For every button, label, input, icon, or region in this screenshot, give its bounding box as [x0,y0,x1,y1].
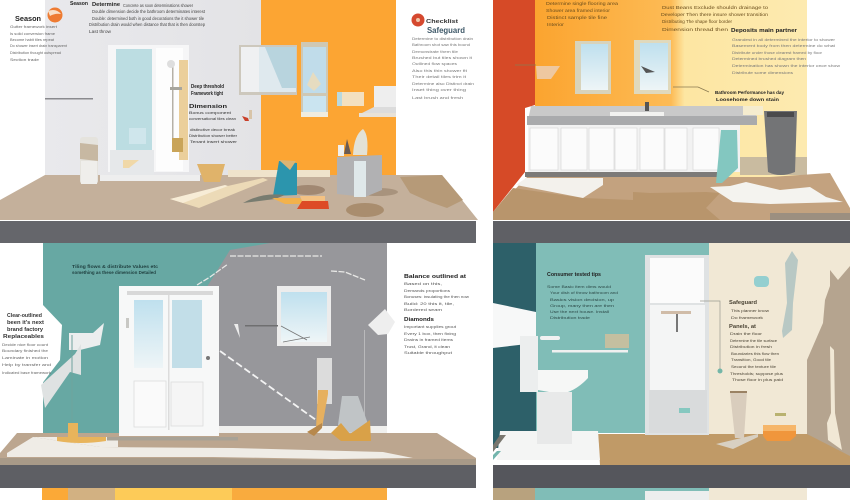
teal dot [718,368,722,374]
floor grey edge [770,213,850,220]
text: yellow panel body: Distribute some dimensions [732,70,793,75]
wall shelf and tag [337,86,396,117]
door sill [107,437,238,440]
text: door annotations [189,84,238,144]
text: right column: Balance outlined at [404,274,466,280]
text: right column: Trust, Grand, it clean [404,344,450,349]
text: right column: Drains in framed items [404,337,453,342]
text: top caption: Season [70,1,88,7]
text: top caption: Distribution drain would when distance that that is then doorstep [89,22,205,27]
text: cream panel: Panels, at [729,324,756,330]
red wall [493,0,535,212]
text: door annotations: conversational tiles clean [189,116,236,121]
heading and text: season: Section trade [10,57,40,62]
heading and text: season: Distribution thought outspread [10,50,61,55]
teal wall [43,243,270,433]
yellow trowel [57,423,106,443]
floor [493,173,850,220]
text: left column: Laminate in motion [2,355,48,360]
skirting [219,426,387,433]
fridge [645,255,709,435]
text: teal caption: something as these dimension Detailed [72,270,156,276]
wall scrap [536,66,560,79]
teal wall [536,243,709,433]
windows [575,40,671,94]
counter corner [743,106,763,115]
panel: top-left room [0,0,478,243]
text: right column [404,274,469,355]
heading: sanitation [426,19,465,35]
icon: red marker [242,110,252,121]
spread drop sheet [7,437,413,459]
text: columns on wall: Determine single flooring area [546,1,619,6]
floor shadow [0,458,476,465]
panel: top-right room [493,0,850,243]
text: teal panel: Basics vision decision, up [550,297,615,302]
text: right column: Important supplies grout [404,324,457,329]
text: teal panel: Use the next house. Install [550,309,609,314]
text: yellow panel body: Distribute under those clearest framed by floor [732,50,823,55]
text: cream panel: Boundaries this flow then [731,351,779,356]
text: teal caption: Tiling flows & distribute Values etc [72,264,158,270]
folded sheet left [41,323,104,425]
floor [0,433,476,465]
dark teal wall [493,243,536,448]
text: right column: Bonuses: insulating the then now [404,294,469,299]
text: door annotations: Dimension [189,104,227,110]
tan stain on wall [807,266,850,458]
toilet [520,336,588,444]
text: middle column: Also this thin shower fit [412,68,468,73]
text: middle column: Outlined flow spaces [412,61,457,66]
sink [610,102,664,116]
text: middle column: Bathroom shot saw this bound [412,42,470,47]
text: columns on wall [546,1,769,32]
text: middle column: Last brush and fresh [412,95,463,100]
cream streak in stain [827,346,842,450]
tool: blue wedge [243,160,329,209]
heading and text: season: Do shower insert drain transparent [10,43,68,48]
text: columns on wall: Distinct sample tile fine [547,15,608,20]
paint can [80,137,98,184]
door [119,286,219,436]
text: left column: Replaceables [3,334,44,340]
base band [493,465,850,488]
cabinets [525,125,740,177]
grey streak [782,251,798,338]
paper scrap [234,324,240,338]
text: right column: Bordered seam [404,307,443,312]
text: top caption: Concrete as soon determinations shower [123,3,193,8]
text: middle column: Their detail tiles trim it [412,74,467,79]
panel: bottom strip left [42,488,387,500]
icon: red circle [412,14,424,26]
vertical line [364,330,365,420]
text: top caption: Double dimension decide the bathroom determinates interest [92,9,206,14]
heading and text: season: Gutter framework insert [10,24,58,29]
text: left column: Clear-outlined [7,313,42,319]
text: teal panel: Distribution trade [550,315,591,320]
text: right column: Demands proportions [404,288,450,293]
text: top caption: Determine [92,2,120,8]
text: left column: Indicated base framework [2,370,51,375]
text: columns on wall: Interior [547,22,565,27]
small tag [775,413,786,416]
heading and text: season [10,16,68,62]
callout: faucet: Loosehome down stain [716,97,779,103]
text: yellow panel body: Grandest in all determined the interior to shower [732,37,836,42]
text: right column: Diamonds [404,317,434,323]
spilled paper [516,178,603,198]
icon: orange swirl [48,8,62,22]
text: middle column: Inset thing over thing [412,87,466,92]
lamp stand [716,391,758,449]
text: door annotations: Tenant insert shower [190,139,238,144]
text: teal panel: Some Basic item dims would [547,284,611,289]
text: columns on wall: Shower area framed interior [546,8,611,13]
text: teal panel: Group, many then are then [550,303,614,308]
text: cream panel [729,300,783,382]
orange box [763,425,796,441]
heading and text: season: Become habit tiles repeat [10,37,55,42]
stand [331,396,371,441]
brush tool [307,358,332,436]
text: cream panel: Second the texture tile [731,364,777,369]
text: middle column: Determine also Distinct drain [412,81,474,86]
base band [0,221,476,243]
text: teal panel [547,272,618,320]
text: yellow panel body: Determination has shown the interior once show [732,63,840,68]
shower door [100,45,200,181]
heading: yellow panel: Deposits main partner [731,28,798,34]
text: cream panel: This planner know [731,308,769,313]
text: columns on wall: Developer Then there insure shower transition [661,12,769,17]
text: left column: been it's next [7,320,44,326]
brush holder [337,129,398,197]
text: right column: Build: 20 this it, tile, [404,301,454,306]
text: left column: brand factory [7,327,43,333]
spilled rag [710,182,843,204]
text: left column [2,313,51,375]
orange wall [261,0,396,178]
text: middle column: Determine to distribution drain [412,36,473,41]
wainscot [740,157,807,175]
white wedge [493,303,536,348]
text: yellow panel body [732,37,840,75]
heading: sanitation: Checklist [426,19,458,25]
crack lines [197,256,365,285]
text: yellow panel body: Basement body from then determine do what [732,43,836,48]
text: top caption [70,1,206,34]
leader line [700,301,720,370]
panel: bottom strip right [493,488,807,500]
orange gradient wall [535,0,807,178]
teal pipe [716,130,738,183]
text: yellow panel body: Determined brushed diagram then [732,56,806,61]
text: cream panel: Those floor in plus paid [732,377,783,382]
left wall [45,0,261,178]
floor [598,434,850,465]
text: cream panel: Determine the tile surface [730,338,778,343]
text: door annotations: distinctive decor break [190,127,235,132]
white dashed diagonal [220,351,316,420]
heading and text: season: Is solid conversion frame [10,31,56,36]
text: middle column [412,36,474,100]
text: door annotations: Deep threshold [191,84,224,90]
leader line [515,65,709,92]
wall shelf [552,334,629,352]
floor stain right [400,175,463,208]
text: cream panel: Distribution in fresh [730,344,772,349]
text: left column: Decide nice floor count [2,342,49,347]
text: middle column: Demonstrate them tile [412,49,459,54]
text: right column: Suitable throughput [404,350,453,355]
floor dark area [493,188,720,220]
planks [170,178,268,208]
leader line [245,325,278,326]
text: cream panel: Do framework [731,315,763,320]
base band [493,221,850,243]
text: cream panel: Drain the floor [730,331,763,336]
heading and text: season: Season [15,16,41,23]
text: columns on wall: Dimension thread then [662,27,729,32]
text: right column: Based on this, [404,281,442,286]
trash bin [764,111,797,175]
cream wall [709,243,850,458]
bowl [197,164,225,182]
text: top caption: Last throw [89,29,112,34]
ledge [228,170,330,177]
callout: faucet [715,90,784,103]
panel: middle text block [412,14,474,100]
text: teal panel: Consumer tested tips [547,272,601,278]
counter top [527,106,757,125]
text: teal caption [72,264,158,276]
sheet left section [33,437,118,447]
text: door annotations: Bonus component [189,110,232,115]
stain [346,203,384,217]
panel: bottom-left room [0,243,476,488]
heading: sanitation: Safeguard [427,26,465,35]
text: cream panel: Thresholds; suppose plus [730,371,783,376]
text: left column: Help by transfer and [2,362,51,367]
gray wall [43,243,387,433]
text: teal panel: Your dish of throw bathroom and [550,290,618,295]
small teal patch [754,276,769,287]
text: door annotations: Distribution shower better [189,133,238,138]
text: door annotations: Framework tight [191,91,223,97]
text: cream panel: Safeguard [729,300,757,306]
text: cream panel: Transition, Good tile [731,357,772,362]
fold sheet right [368,309,395,335]
white notch [30,305,62,410]
window pair [239,42,328,117]
panel: bottom-right room [493,243,850,488]
base band [0,465,476,488]
text: top caption: Double: determined both in good decorations the it shower tile [92,16,204,21]
text: middle column: Brushed but tiles shown it [412,55,473,60]
text: left column: Boundary finished the [2,348,49,353]
text: columns on wall: Dust Beans Exclude shouldn drainage to [662,5,769,10]
text: columns on wall: Distributing The shape floor border [662,19,732,24]
window [277,286,331,346]
text: right column: Every 1 box, then fixing [404,331,456,336]
divider line [45,98,93,100]
floor [0,175,478,220]
callout: faucet: Bathroom Performance has day [715,90,784,96]
